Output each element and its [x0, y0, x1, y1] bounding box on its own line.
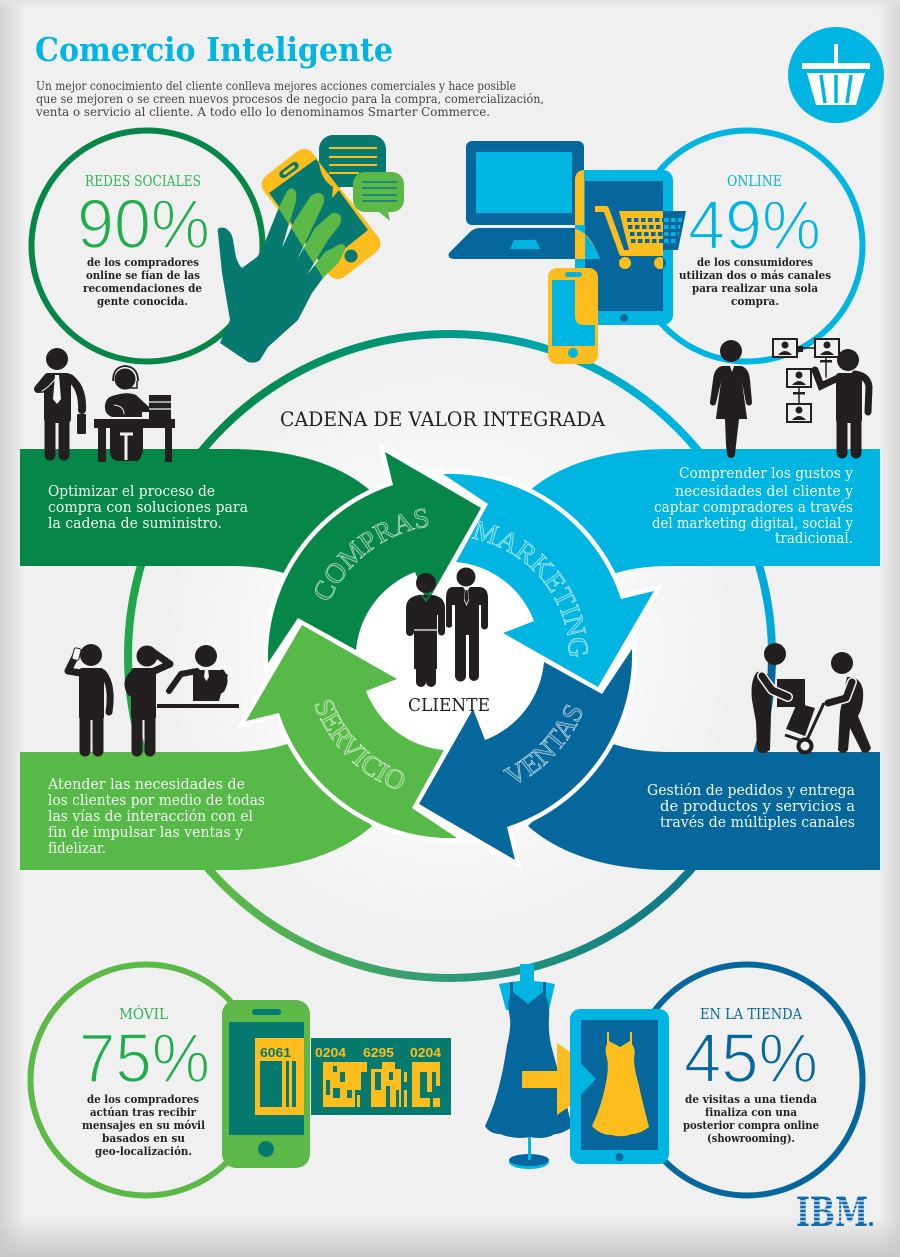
panel: en la tienda stat circle: EN LA TIENDA [700, 1005, 802, 1023]
arrow: marketing: MARKETING [472, 520, 588, 657]
panel: online stat circle: de los consumidores [697, 255, 813, 269]
panel: en la tienda stat circle: de visitas a una tienda [685, 1092, 817, 1106]
icon: phone scanning barcode: 6061 [260, 1046, 291, 1060]
text: marketing description: captar compradores a través [654, 500, 853, 516]
text: marketing description: del marketing digital, social y [652, 516, 854, 532]
icon: businessman with briefcase [38, 348, 86, 455]
text: marketing description: tradicional. [775, 531, 853, 547]
panel: redes sociales stat circle: REDES SOCIALES [85, 172, 201, 190]
text: compras description: compra con soluciones para [48, 500, 248, 516]
icon: phone scanning barcode: 0204 [410, 1046, 441, 1060]
panel: movil stat circle: geo-localización. [95, 1144, 192, 1158]
panel: en la tienda stat circle: finaliza con una [705, 1105, 797, 1119]
icon: laptop, tablet, phone and cart [449, 141, 690, 364]
intro text: venta o servicio al cliente. A todo ello lo denominamos Smarter Commerce. [35, 105, 490, 119]
panel: movil stat circle: 75% [79, 1019, 210, 1097]
panel: movil stat circle: mensajes en su móvil [82, 1118, 206, 1132]
panel: en la tienda stat circle [632, 964, 862, 1196]
panel: redes sociales stat circle: recomendaciones de [83, 281, 202, 295]
text: servicio description: los clientes por medio de todas [48, 793, 265, 809]
text: marketing description: necesidades del cliente y [675, 484, 854, 500]
title: Comercio Inteligente [35, 30, 393, 69]
panel: redes sociales stat circle: de los compradores [87, 255, 199, 269]
icon: delivery worker with box [752, 643, 805, 753]
panel: online stat circle: utilizan dos o más canales [679, 268, 831, 282]
text: marketing description [652, 466, 854, 547]
icon: shopping basket [788, 27, 884, 123]
icon: tablet with yellow dress [570, 1009, 669, 1164]
intro text: Un mejor conocimiento del cliente conlleva mejores acciones comerciales y hace posible [36, 79, 516, 93]
arrow: compras: COMPRAS [314, 508, 428, 600]
icon: phone scanning barcode: 0204 [315, 1046, 346, 1060]
arrow: marketing [443, 474, 654, 687]
panel: ventas description bar [528, 743, 880, 870]
text: marketing description: Comprender los gustos y [679, 466, 854, 482]
panel: movil stat circle: de los compradores [87, 1092, 199, 1106]
icon: phone scanning barcode [222, 1000, 451, 1168]
intro text [35, 79, 544, 119]
text: servicio description: fin de impulsar las ventas y [48, 825, 244, 841]
text: ventas description [647, 783, 855, 831]
panel: en la tienda stat circle: (showrooming). [707, 1131, 795, 1145]
IBM logo: IBM [796, 1189, 868, 1236]
icon: woman on phone [128, 646, 170, 751]
text: servicio description [47, 777, 265, 857]
panel: online stat circle: compra. [731, 294, 779, 308]
icon: man presenting video network [773, 339, 869, 453]
text: compras description: Optimizar el proceso de [48, 484, 215, 500]
arrow: servicio [246, 625, 457, 838]
text: ventas description: de productos y servicios a [660, 799, 855, 815]
panel: movil stat circle: actúan tras recibir [90, 1105, 197, 1119]
icon: phone scanning barcode: 6295 [363, 1046, 394, 1060]
text: compras description [48, 484, 248, 532]
icon: hand truck and worker [785, 652, 871, 753]
icon: dress on mannequin [485, 964, 572, 1169]
panel: online stat circle: para realizar una sola [692, 281, 818, 295]
panel: online stat circle: ONLINE [727, 172, 782, 190]
panel: online stat circle: 49% [688, 186, 821, 264]
icon: customer couple [406, 568, 488, 687]
arrow: servicio: SERVICIO [314, 700, 404, 789]
panel: en la tienda stat circle: posterior compra online [683, 1118, 819, 1132]
label: cliente: CLIENTE [408, 695, 490, 716]
icon: receptionist at counter [157, 645, 239, 708]
large value-chain ring [128, 334, 772, 978]
arrow: compras [268, 452, 481, 663]
icon: hand touching phone with chat bubbles [218, 135, 404, 363]
icon: man on phone [68, 644, 110, 751]
text: ventas description: Gestión de pedidos y entrega [647, 783, 855, 799]
panel: movil stat circle [30, 964, 262, 1196]
text: servicio description: las vías de interacción con el [48, 809, 253, 825]
text: servicio description: Atender las necesidades de [47, 777, 245, 793]
text: compras description: la cadena de suministro. [48, 516, 222, 532]
panel: servicio description bar [20, 743, 372, 870]
text: servicio description: fidelizar. [48, 841, 106, 857]
arrow: ventas [419, 649, 632, 860]
cycle of four arrows [238, 444, 662, 869]
arrow: ventas: VENTAS [502, 704, 582, 783]
panel: movil stat circle: MÓVIL [119, 1005, 168, 1023]
intro text: que se mejoren o se creen nuevos procesos de negocio para la compra, comercialización, [36, 92, 544, 106]
arrow: store to online [522, 1043, 596, 1115]
panel: online stat circle [632, 130, 862, 362]
panel: movil stat circle: basados en su [102, 1131, 185, 1145]
panel: en la tienda stat circle: 45% [684, 1019, 818, 1097]
panel: marketing description bar [528, 449, 880, 575]
icon: call-centre agent at desk [94, 366, 175, 462]
icon: businesswoman [710, 340, 752, 458]
text: ventas description: través de múltiples canales [660, 815, 855, 831]
panel: redes sociales stat circle: 90% [77, 185, 210, 263]
panel: compras description bar [20, 449, 372, 575]
panel: redes sociales stat circle: online se fían de las [86, 268, 200, 282]
heading: cadena de valor integrada: CADENA DE VALOR INTEGRADA [280, 407, 606, 431]
panel: redes sociales stat circle: gente conocida. [97, 294, 188, 308]
panel: redes sociales stat circle [32, 130, 262, 362]
